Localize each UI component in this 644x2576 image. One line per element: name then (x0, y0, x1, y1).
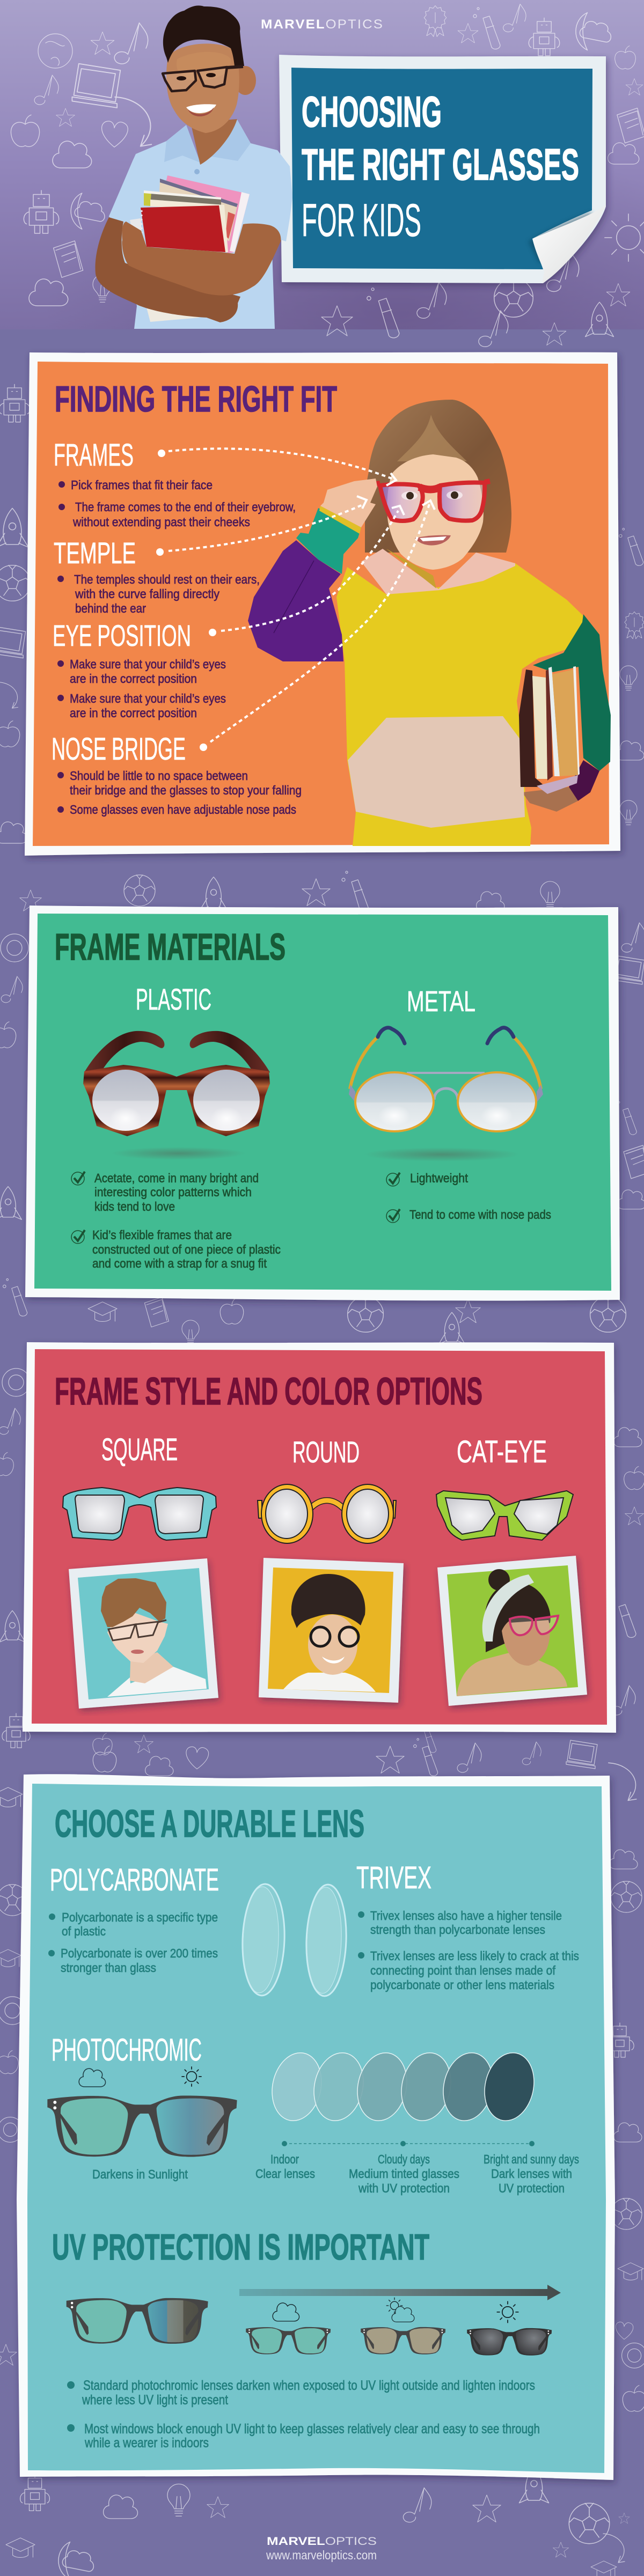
title text: FOR KIDS (302, 195, 421, 246)
header background (0, 0, 644, 329)
heading: FINDING THE RIGHT FIT (55, 379, 337, 419)
panel: frame style and color options (23, 1342, 616, 1733)
text block: UV bullets: Standard photochromic lenses darken when exposed to UV light outside and lighten indoors (83, 2378, 535, 2393)
list: plastic points: kids tend to love (94, 1199, 175, 1213)
hand (320, 479, 377, 527)
arrow: temple (156, 496, 367, 556)
arms (95, 217, 240, 322)
icon: sun (181, 2066, 202, 2087)
cuff: dark purple (569, 760, 599, 801)
illustration: glasses cloudy (361, 2327, 445, 2354)
logo: Marvel Optics header: MARVEL OPTICS (261, 17, 384, 32)
caption: cloudy days: Cloudy days (378, 2152, 430, 2166)
text block: trivex (356, 1860, 579, 1992)
panel: choose a durable lens (17, 1774, 615, 2480)
illustration: girl with red glasses (248, 400, 611, 846)
text block: temple: behind the ear (75, 601, 146, 615)
text block: trivex: Trivex lenses also have a higher tensile (370, 1909, 562, 1923)
text block: frames: The frame comes to the end of their eyebrow, (75, 500, 296, 514)
hand (522, 787, 578, 812)
panel: title poster (279, 55, 606, 283)
text block: trivex: connecting point than lenses made of (370, 1963, 556, 1977)
illustration: photochromic glasses (47, 2096, 237, 2157)
text block: trivex: polycarbonate or other lens materials (370, 1978, 554, 1992)
illustration: round glasses (258, 1484, 396, 1543)
text block: eye position: are in the correct position (70, 672, 197, 686)
books (161, 175, 250, 253)
list: metal points (386, 1171, 551, 1223)
arrow: eye position (209, 506, 404, 636)
photo: girl with cat-eye glasses (437, 1556, 587, 1706)
photo: boy with round glasses (259, 1558, 404, 1703)
caption: indoor: Indoor (270, 2152, 299, 2166)
icon: cloud (273, 2303, 299, 2321)
caption: indoor: Clear lenses (255, 2167, 315, 2181)
yellow cuff (319, 506, 361, 534)
caption: cloudy days: Medium tinted glasses (349, 2167, 459, 2181)
books (519, 666, 580, 794)
illustration: lens tint series (266, 2048, 540, 2125)
text block: polycarbonate: Polycarbonate is a specific type (62, 1910, 218, 1924)
text block: frames (54, 438, 296, 529)
list: metal points: Lightweight (410, 1171, 469, 1185)
illustration: square glasses (63, 1488, 216, 1540)
sleeve: green (533, 614, 611, 771)
label: plastic: PLASTIC (136, 982, 211, 1016)
smile (186, 104, 216, 113)
list: plastic points: and come with a strap for a snug fit (92, 1256, 267, 1270)
text block: polycarbonate: of plastic (62, 1924, 106, 1938)
neck and face (191, 119, 237, 165)
list: plastic points: Acetate, come in many bright and (94, 1171, 259, 1185)
caption: bright and sunny days: Bright and sunny days (484, 2152, 579, 2166)
caption: cloudy days (349, 2152, 459, 2195)
red glasses (372, 481, 490, 521)
text block: eye position: Make sure that your child’s eyes (70, 657, 226, 671)
illustration: glasses sunny (467, 2328, 552, 2356)
list: plastic points: Kid’s flexible frames that are (92, 1228, 232, 1242)
page curl (532, 204, 606, 283)
text block: frames: FRAMES (54, 438, 134, 473)
heading: CHOOSE A DURABLE LENS (55, 1803, 364, 1845)
icon: sun behind cloud (386, 2298, 414, 2322)
icon: check (71, 1172, 85, 1185)
text block: eye position: Make sure that your child’s eyes (70, 691, 226, 705)
text block: UV bullets: while a wearer is indoors (84, 2435, 209, 2450)
label: round: ROUND (292, 1435, 360, 1469)
text block: polycarbonate: Polycarbonate is over 200 times (61, 1946, 218, 1960)
icon: check (386, 1173, 400, 1186)
list: metal points: Tend to come with nose pads (409, 1208, 551, 1221)
text block: temple: The temples should rest on their ears, (74, 572, 260, 586)
sweater (336, 563, 583, 846)
callout arrows: dotted lines (156, 448, 435, 751)
title text: CHOOSING (302, 88, 442, 136)
text block: UV bullets: where less UV light is present (82, 2393, 228, 2408)
label: cat-eye: CAT-EYE (457, 1434, 547, 1469)
text block: polycarbonate: stronger than glass (61, 1961, 156, 1975)
illustration: metal glasses (349, 1028, 543, 1161)
purple sleeve (248, 540, 343, 661)
green cuff (296, 508, 361, 574)
panel: finding the right fit (25, 352, 620, 856)
icon: check (386, 1209, 400, 1223)
heading: UV protection: UV PROTECTION IS IMPORTANT (52, 2227, 429, 2268)
list: plastic points (71, 1171, 281, 1270)
caption: bright and sunny days (484, 2152, 579, 2195)
text block: temple (54, 536, 260, 615)
text block: frames: Pick frames that fit their face (71, 478, 213, 492)
caption: indoor (255, 2152, 315, 2181)
arrow: frames (158, 448, 396, 485)
icon: cloud (79, 2069, 106, 2087)
glasses (163, 67, 227, 91)
text block: UV bullets (67, 2378, 540, 2450)
photo: boy with square glasses (69, 1558, 218, 1709)
caption: bright and sunny days: Dark lenses with (491, 2167, 572, 2181)
arrow: increasing UV (239, 2285, 561, 2300)
footer: logo and url: www.marveloptics.com (266, 2548, 377, 2562)
caption: darkens in sunlight: Darkens in Sunlight (92, 2167, 188, 2181)
text block: temple: TEMPLE (54, 536, 136, 570)
illustration: glasses indoors (246, 2327, 331, 2354)
text block: nose bridge: NOSE BRIDGE (52, 732, 186, 767)
text block: polycarbonate (48, 1863, 219, 1975)
arrow: nose bridge (200, 501, 435, 751)
text block: trivex: TRIVEX (356, 1860, 431, 1895)
illustration: cat-eye glasses (436, 1491, 573, 1540)
footer: logo and url (266, 2535, 377, 2562)
footer: logo and url: MARVEL OPTICS (267, 2535, 377, 2548)
timeline: indoor to sunny (282, 2141, 535, 2146)
text block: polycarbonate: POLYCARBONATE (50, 1863, 219, 1897)
illustration: UV split glasses (67, 2298, 208, 2344)
text block: temple: with the curve falling directly (75, 587, 219, 601)
text block: nose bridge (52, 732, 302, 816)
text block: nose bridge: their bridge and the glasses to stop your falling (70, 783, 302, 797)
text block: eye position: EYE POSITION (53, 619, 191, 652)
eyes (401, 491, 418, 500)
illustration: clear lenses (240, 1883, 348, 1997)
text block: eye position: are in the correct position (70, 706, 197, 720)
label: metal: METAL (407, 985, 475, 1018)
illustration: plastic glasses (83, 1031, 270, 1160)
icon: sun (497, 2301, 518, 2323)
list: plastic points: interesting color patterns which (94, 1185, 252, 1199)
panel: frame materials (25, 906, 620, 1301)
text block: trivex: Trivex lenses are less likely to crack at this (370, 1949, 579, 1963)
hood (361, 549, 515, 594)
mouth (415, 535, 451, 546)
photo: boy holding books (95, 5, 292, 329)
text block: eye position (53, 619, 226, 720)
caption: bright and sunny days: UV protection (499, 2181, 565, 2195)
text block: nose bridge: Some glasses even have adjustable nose pads (70, 803, 296, 816)
hair (163, 5, 244, 66)
hair (365, 400, 511, 553)
face (387, 454, 484, 570)
shirt (109, 120, 292, 329)
pocket (348, 716, 525, 828)
label: photochromic: PHOTOCHROMIC (52, 2033, 202, 2067)
caption: cloudy days: with UV protection (358, 2181, 450, 2195)
text block: nose bridge: Should be little to no space between (70, 769, 248, 783)
text block: UV bullets: Most windows block enough UV light to keep glasses relatively clear and easy to see through (84, 2422, 540, 2437)
title text (302, 88, 579, 246)
icon: check (71, 1230, 85, 1243)
list: plastic points: constructed out of one piece of plastic (92, 1242, 281, 1256)
heading: FRAME MATERIALS (55, 926, 286, 968)
label: square: SQUARE (101, 1432, 178, 1467)
text block: frames: without extending past their cheeks (72, 515, 250, 529)
text block: trivex: strength than polycarbonate lenses (370, 1923, 545, 1937)
